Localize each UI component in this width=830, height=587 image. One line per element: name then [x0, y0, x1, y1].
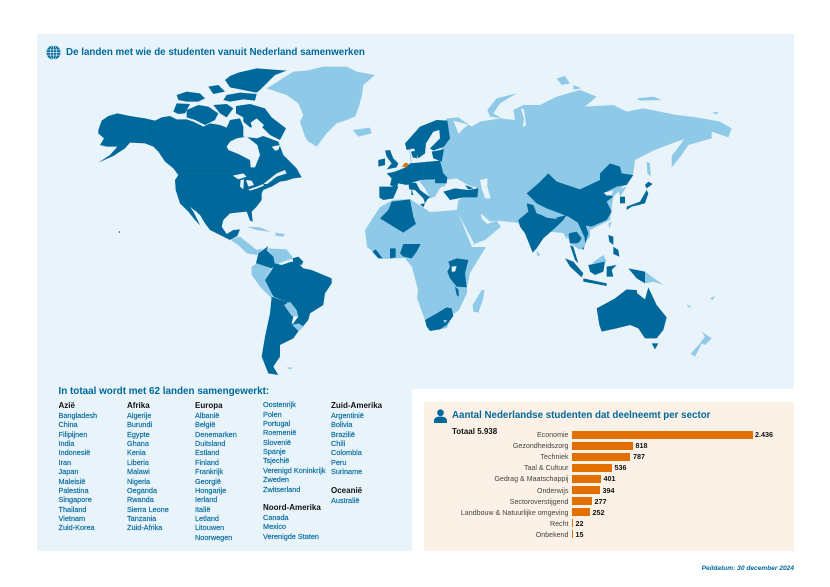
countries column one: Duitsland [195, 439, 225, 448]
countries column two: Verenigd Koninkrijk [263, 466, 325, 475]
Europe [378, 120, 478, 207]
countries column one: Italië [195, 505, 210, 514]
continent heading: Zuid-Amerika [331, 401, 382, 410]
countries: Argentinië [331, 411, 364, 420]
bar: Techniek [540, 452, 645, 461]
bar: Sectoroverstijgend [510, 497, 606, 506]
countries column two: Zwitserland [263, 485, 300, 494]
countries column two: Polen [263, 410, 282, 419]
country list: Azië [58, 401, 97, 532]
countries: Colombia [331, 448, 362, 457]
bar: Gezondheidszorg: Gezondheidszorg [513, 442, 568, 450]
country list heading: In totaal wordt met 62 landen samengewerkt: [58, 386, 269, 397]
countries column one: Noorwegen [195, 533, 232, 542]
countries: Iran [58, 458, 71, 467]
countries: Algerije [127, 411, 151, 420]
countries: Indonesië [58, 448, 90, 457]
countries [263, 513, 319, 541]
continent heading: Noord-Amerika [263, 503, 321, 512]
continent heading: Azië [58, 401, 75, 410]
Netherlands highlighted [402, 163, 408, 167]
panel: sector background [424, 402, 794, 551]
countries [330, 411, 364, 476]
countries column one: Letland [195, 514, 219, 523]
bar: Economie [537, 430, 773, 439]
Greenland and Iceland [267, 67, 375, 147]
bar: Gedrag & Maatschappij [494, 474, 616, 483]
Africa [365, 199, 486, 331]
Asia light details: Nepal, Myanmar, Korea [537, 187, 627, 249]
bar: Sectoroverstijgend: Sectoroverstijgend [510, 498, 568, 506]
country list: Oceanië [330, 486, 362, 505]
countries: Bangladesh [58, 411, 97, 420]
heading text: De landen met wie de studenten vanuit Nederland samenwerken [66, 46, 365, 58]
countries: Singapore [58, 495, 92, 504]
countries: Australië [331, 496, 359, 505]
country list: Zuid-Amerika [330, 401, 382, 476]
countries: Peru [331, 458, 346, 467]
continent heading: Afrika [127, 401, 150, 410]
bar: Landbouw & Natuurlijke omgeving: 252 [592, 508, 604, 517]
countries: Nigeria [127, 477, 150, 486]
countries column two: Tsjechië [263, 456, 289, 465]
countries: Malawi [127, 467, 150, 476]
countries: India [58, 439, 74, 448]
countries column one: België [195, 420, 215, 429]
Africa partner countries [380, 199, 416, 233]
bar: Onbekend [536, 530, 584, 539]
bar: Economie: 2.436 [755, 430, 773, 439]
countries: Sierra Leone [127, 505, 169, 514]
countries: Mexico [263, 522, 286, 531]
North America [98, 68, 302, 240]
countries column two [263, 400, 326, 494]
bar: Onbekend: Onbekend [536, 531, 568, 539]
bar: Onderwijs: Onderwijs [537, 486, 568, 494]
bar: Gedrag & Maatschappij: 401 [604, 474, 616, 483]
Africa partner countries south [372, 244, 468, 331]
bar: Gedrag & Maatschappij: Gedrag & Maatschappij [494, 475, 568, 483]
countries column one: Estland [195, 448, 219, 457]
sector heading: Aantal Nederlandse studenten dat deelneemt per sector [452, 410, 710, 421]
countries: Maleisië [58, 477, 85, 486]
Eurasia water: seas [445, 108, 526, 245]
countries: Oeganda [127, 486, 157, 495]
countries: Thailand [58, 505, 86, 514]
countries: Palestina [58, 486, 89, 495]
countries: Verenigde Staten [263, 532, 319, 541]
bar: Landbouw & Natuurlijke omgeving [461, 508, 604, 517]
South America [252, 246, 332, 375]
countries: Tanzania [127, 514, 156, 523]
Central America and Caribbean [230, 227, 285, 255]
countries: Vietnam [58, 514, 85, 523]
countries column one: Georgië [195, 477, 221, 486]
bar: Onbekend: 15 [576, 530, 584, 539]
continent heading: Oceanië [331, 486, 362, 495]
bar: Onderwijs: 394 [602, 486, 614, 494]
bar: Recht: 22 [576, 519, 584, 528]
bar chart: students per sector [461, 430, 773, 539]
bar: Landbouw & Natuurlijke omgeving: Landbouw & Natuurlijke omgeving [461, 509, 568, 517]
bar: Taal & Cultuur: 536 [614, 463, 626, 472]
country list: Noord-Amerika [263, 503, 321, 541]
countries column two: Portugal [263, 419, 290, 428]
countries column two: Spanje [263, 447, 286, 456]
countries column two: Zweden [263, 475, 289, 484]
countries: China [58, 420, 78, 429]
countries [126, 411, 169, 532]
bar: Taal & Cultuur [524, 463, 626, 472]
total: Totaal 5.938 [452, 427, 497, 436]
Eurasia light countries [437, 76, 732, 285]
countries: Suriname [331, 467, 362, 476]
countries column two: Roemenië [263, 428, 296, 437]
Oceania [597, 287, 715, 357]
bar: Sectoroverstijgend: 277 [594, 497, 606, 506]
countries column one: Finland [195, 458, 219, 467]
map heading [46, 46, 365, 60]
country list: Europa [194, 400, 326, 542]
countries: Ghana [127, 439, 149, 448]
countries column one: Litouwen [195, 523, 224, 532]
countries column one: Denemarken [195, 430, 237, 439]
bar: Techniek: 787 [633, 452, 645, 461]
bar: Taal & Cultuur: Taal & Cultuur [524, 464, 568, 472]
countries [58, 411, 97, 532]
countries column one: Ierland [195, 495, 217, 504]
countries: Burundi [127, 420, 152, 429]
countries: Canada [263, 513, 289, 522]
countries column one: Frankrijk [195, 467, 223, 476]
icon: globe [46, 46, 60, 60]
bar: Onderwijs [537, 486, 614, 494]
bar: Economie: Economie [537, 431, 568, 439]
countries: Brazilië [331, 430, 355, 439]
countries: Liberia [127, 458, 149, 467]
countries: Japan [58, 467, 78, 476]
countries: Rwanda [127, 495, 154, 504]
countries: Egypte [127, 430, 150, 439]
Madagascar [473, 290, 484, 313]
North America water: Hudson Bay and Great Lakes [193, 118, 287, 227]
bar: Recht: Recht [550, 520, 568, 528]
countries: Kenia [127, 448, 146, 457]
countries column one: Albanië [195, 411, 219, 420]
bar: Gezondheidszorg: 818 [636, 441, 648, 450]
white cutout around sector panel [412, 389, 794, 551]
bar: Techniek: Techniek [540, 453, 568, 461]
Asia partner countries [518, 163, 653, 286]
continent heading: Europa [195, 401, 223, 410]
bar: Gezondheidszorg [513, 441, 648, 450]
countries column one [194, 411, 237, 542]
Hawaii [119, 231, 120, 233]
countries column two: Oostenrijk [263, 400, 296, 409]
footnote: reference date: Peildatum: 30 december 2024 [702, 565, 794, 572]
countries: Zuid-Afrika [127, 523, 162, 532]
countries: Bolivia [331, 420, 352, 429]
icon: person [434, 409, 447, 423]
bar: Recht [550, 519, 584, 528]
countries column two: Slovenië [263, 438, 291, 447]
countries: Filipijnen [58, 430, 87, 439]
country list: Afrika [126, 401, 169, 532]
countries: Chili [331, 439, 345, 448]
countries: Zuid-Korea [58, 523, 95, 532]
countries column one: Hongarije [195, 486, 226, 495]
